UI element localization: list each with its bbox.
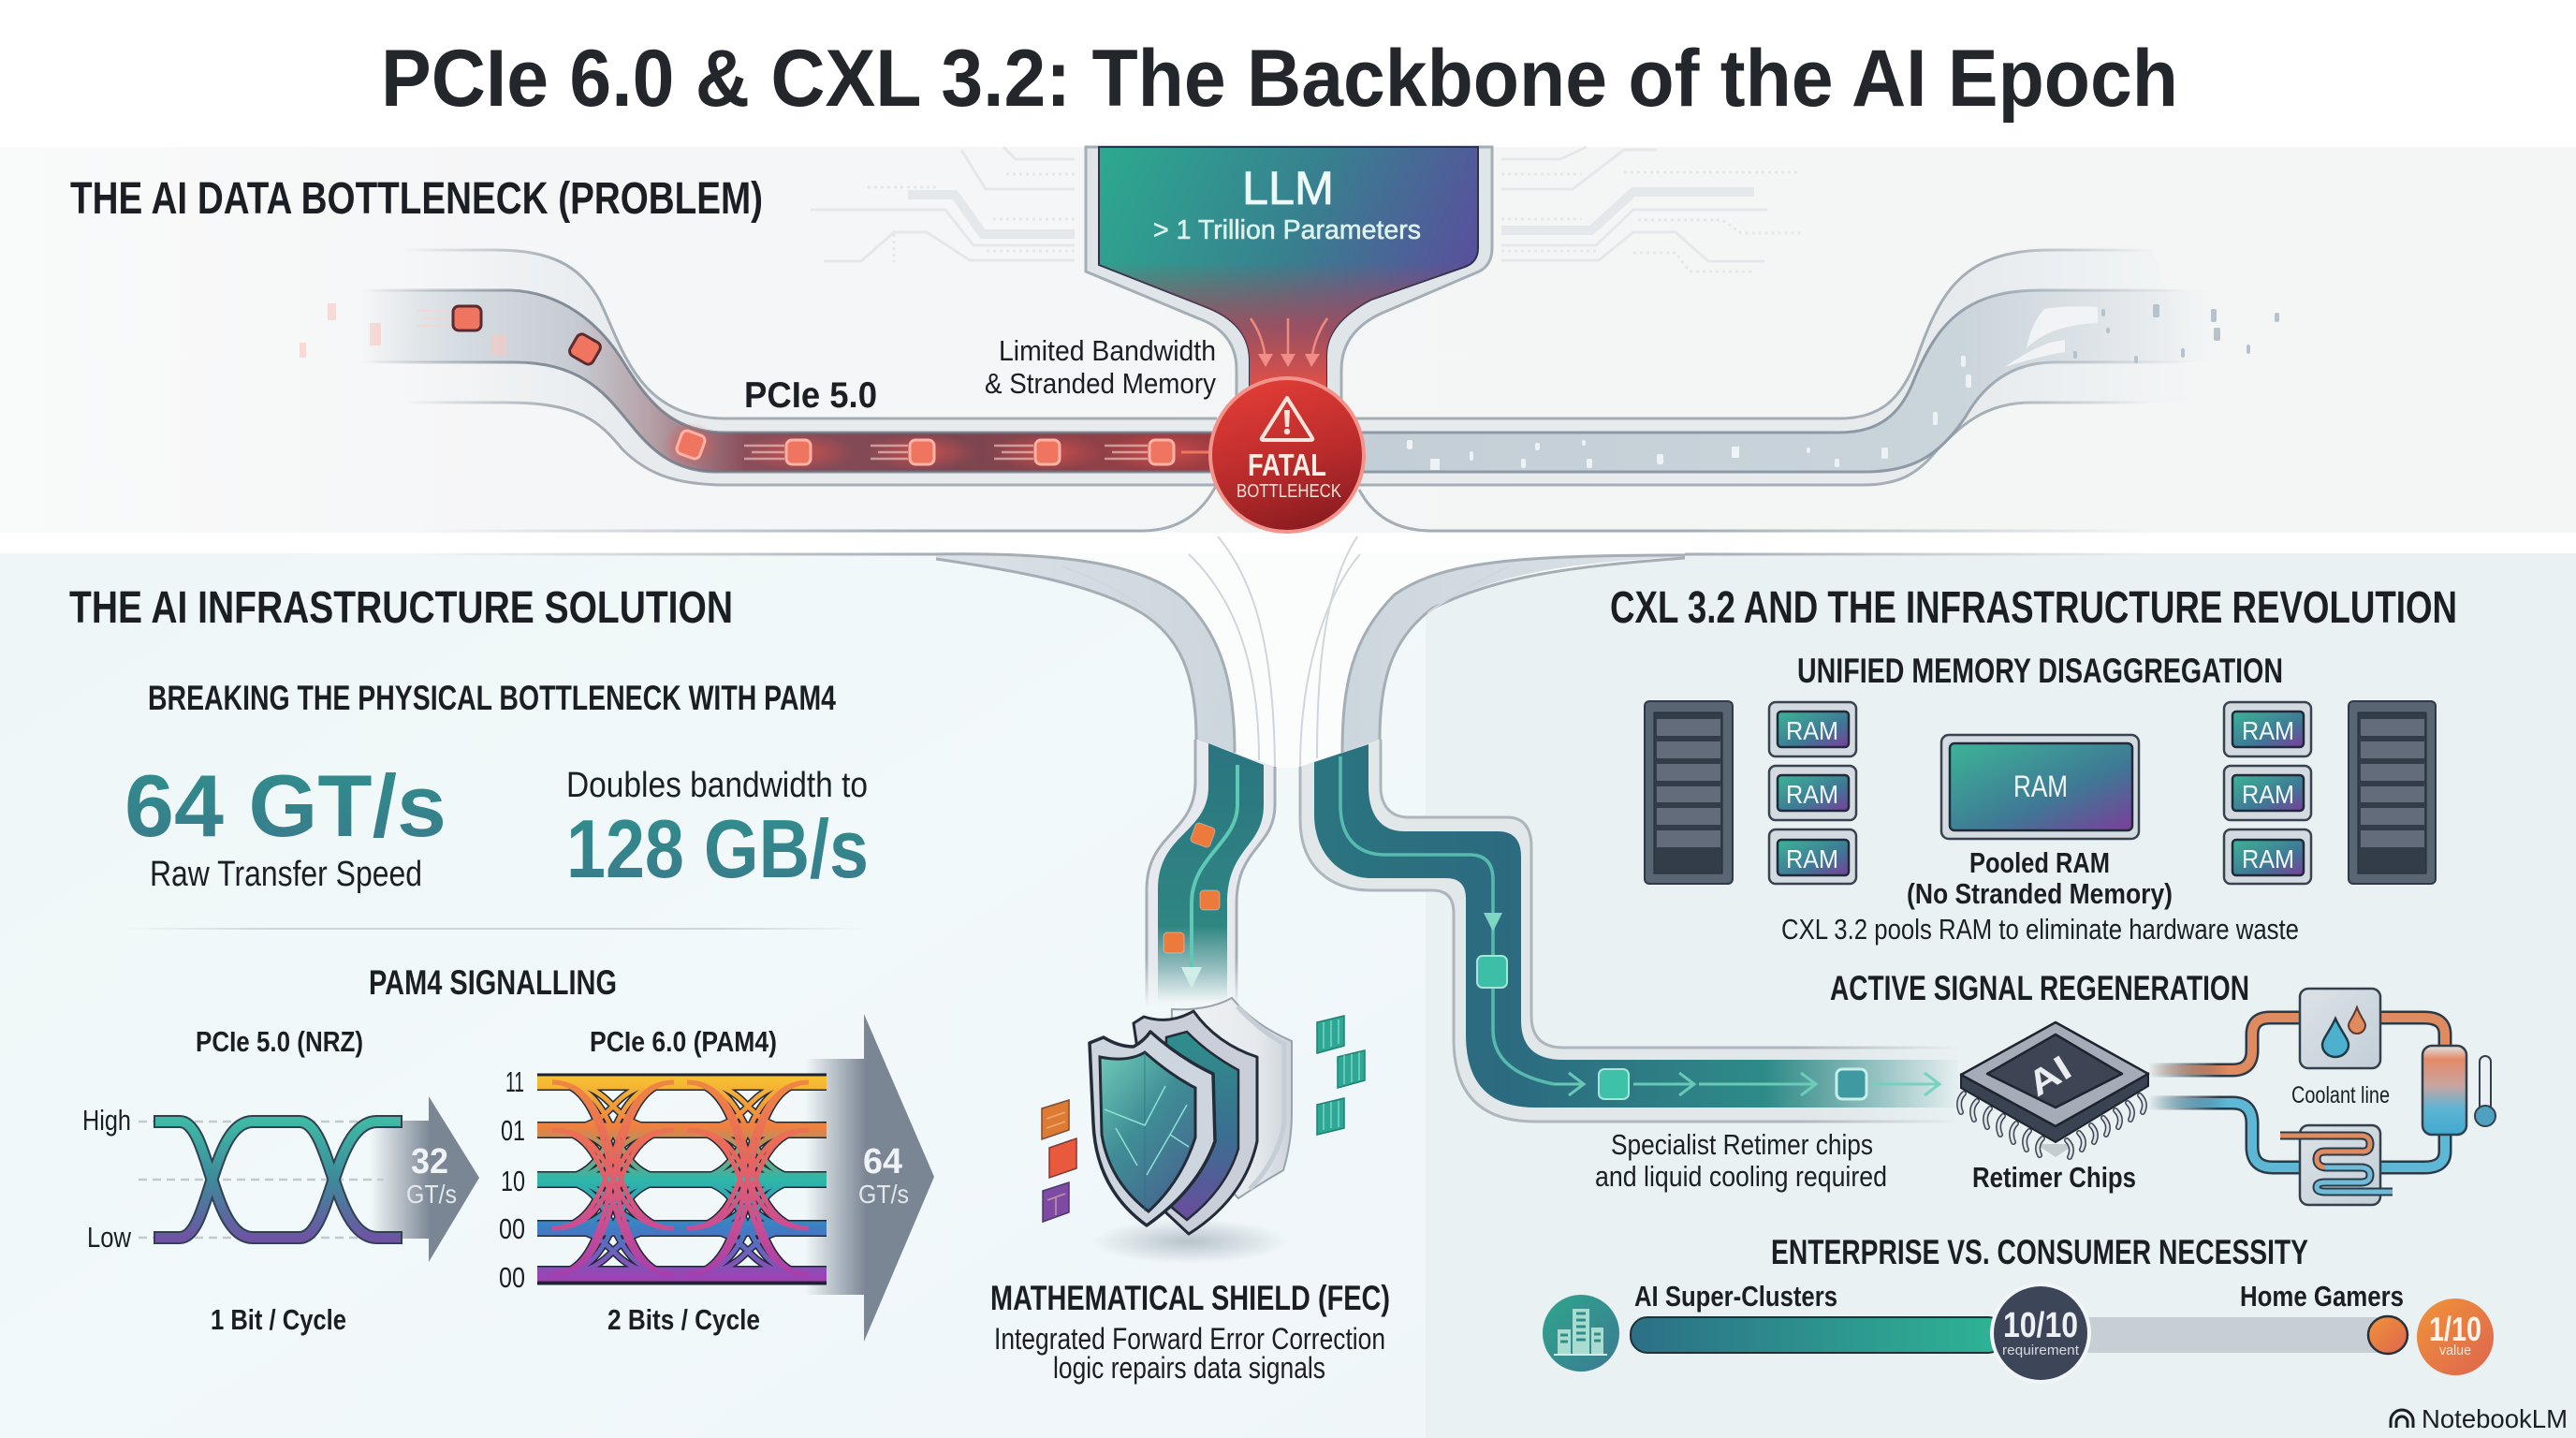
PAM4 eye diagram: 2 Bits / Cycle bbox=[607, 1303, 760, 1336]
label LLM: LLM bbox=[1242, 162, 1334, 214]
FEC text: logic repairs data signals bbox=[1053, 1351, 1325, 1385]
circuit traces right of LLM bbox=[1501, 147, 1802, 271]
RAM modules right: RAM bbox=[2242, 844, 2294, 873]
FEC text: MATHEMATICAL SHIELD (FEC) bbox=[990, 1279, 1390, 1317]
retimer captions: and liquid cooling required bbox=[1595, 1160, 1887, 1193]
NRZ diagram: Low bbox=[87, 1221, 132, 1254]
title: PCIe 6.0 & CXL 3.2: The Backbone of the AI Epoch bbox=[381, 34, 2178, 124]
gauge labels: AI Super-Clusters bbox=[1634, 1280, 1837, 1313]
level labels: 01 bbox=[501, 1114, 525, 1147]
front shield bbox=[1090, 1032, 1215, 1225]
pooled RAM caption: Pooled RAM bbox=[1969, 846, 2110, 879]
gauge labels bbox=[1634, 1280, 2404, 1313]
1/10 badge: value bbox=[2439, 1343, 2471, 1358]
data packets bbox=[453, 306, 1174, 464]
RAM modules right bbox=[2224, 702, 2311, 884]
RAM modules left: RAM bbox=[1786, 780, 1838, 809]
shield icon bbox=[1090, 998, 1292, 1264]
label PCIe 5.0: PCIe 5.0 bbox=[744, 375, 877, 416]
back shield bbox=[1170, 998, 1292, 1198]
fatal bottleneck badge bbox=[1210, 378, 1364, 532]
heading: PAM4 signalling: PAM4 SIGNALLING bbox=[369, 963, 617, 1002]
level labels: 00 bbox=[499, 1212, 525, 1245]
arrow 32 GT/s bbox=[370, 1096, 479, 1262]
white swooshes and particles bbox=[1407, 306, 2098, 470]
label parameters: > 1 Trillion Parameters bbox=[1153, 215, 1421, 245]
pooled RAM caption: CXL 3.2 pools RAM to eliminate hardware waste bbox=[1781, 913, 2299, 946]
PAM4 eye diagram bbox=[499, 1014, 934, 1342]
circuit traces left of LLM bbox=[811, 147, 1075, 262]
gauge bar bbox=[1631, 1316, 2408, 1354]
level labels bbox=[499, 1065, 525, 1294]
server rack right bbox=[2349, 701, 2436, 884]
pooled RAM: RAM bbox=[2013, 770, 2068, 803]
NotebookLM mark: NotebookLM bbox=[2422, 1404, 2568, 1433]
RAM modules left bbox=[1769, 702, 1856, 884]
label limited bandwidth bbox=[985, 334, 1216, 400]
RAM modules right: RAM bbox=[2242, 716, 2294, 745]
arrow 64 GT/s: GT/s bbox=[858, 1180, 909, 1209]
level labels: 11 bbox=[505, 1065, 524, 1098]
middle shield bbox=[1134, 1011, 1257, 1234]
arrow 32 GT/s: 32 bbox=[411, 1142, 448, 1181]
level labels: 00 bbox=[499, 1261, 525, 1294]
heat exchanger coil bbox=[2280, 1125, 2393, 1205]
cooling block with drops bbox=[2300, 989, 2380, 1068]
RAM modules left: RAM bbox=[1786, 844, 1838, 873]
RAM modules left: RAM bbox=[1786, 716, 1838, 745]
PAM4 eye diagram: PCIe 6.0 (PAM4) bbox=[590, 1025, 777, 1058]
error chips left bbox=[1042, 1100, 1076, 1222]
warning triangle bbox=[1262, 398, 1312, 440]
NRZ diagram bbox=[82, 1025, 479, 1336]
label coolant line: Coolant line bbox=[2291, 1082, 2390, 1108]
stat: 64 GT/s: 64 GT/s bbox=[124, 756, 446, 855]
pooled RAM caption: (No Stranded Memory) bbox=[1907, 877, 2173, 910]
label limited bandwidth: Limited Bandwidth bbox=[999, 334, 1216, 367]
heading: problem: THE AI DATA BOTTLENECK (PROBLEM) bbox=[70, 174, 763, 224]
flow arrows bbox=[1251, 318, 1327, 360]
arrow 64 GT/s bbox=[805, 1014, 934, 1342]
retimer captions: Specialist Retimer chips bbox=[1611, 1128, 1873, 1161]
RAM modules right: RAM bbox=[2242, 780, 2294, 809]
boundary line under the problem panel bbox=[421, 484, 2153, 531]
arrowhead bbox=[1181, 967, 1202, 989]
1/10 badge bbox=[2417, 1299, 2494, 1375]
fatal bottleneck badge: FATAL bbox=[1248, 448, 1326, 482]
thermometer bbox=[2475, 1056, 2496, 1126]
funnel gray shell left bbox=[936, 555, 1235, 753]
repaired chips right bbox=[1317, 1016, 1365, 1135]
label limited bandwidth: & Stranded Memory bbox=[985, 367, 1216, 400]
left pipe: FEC input bbox=[1147, 740, 1275, 1006]
NRZ diagram: 1 Bit / Cycle bbox=[211, 1303, 346, 1336]
subheading: enterprise: ENTERPRISE VS. CONSUMER NECESSITY bbox=[1771, 1233, 2308, 1271]
stat: 64 GT/s: Raw Transfer Speed bbox=[150, 855, 422, 894]
packet glows bbox=[663, 422, 1218, 471]
converging white funnel bbox=[936, 553, 1685, 768]
gauge labels: Home Gamers bbox=[2240, 1280, 2404, 1313]
fatal bottleneck badge: BOTTLEHECK bbox=[1237, 481, 1342, 502]
arrow 64 GT/s: 64 bbox=[863, 1142, 902, 1181]
panel: problem background bbox=[0, 147, 2576, 533]
10/10 badge: 10/10 bbox=[2003, 1306, 2078, 1345]
building icon bbox=[1543, 1295, 1619, 1372]
stat: 128 GB/s bbox=[566, 766, 869, 895]
FEC text bbox=[990, 1279, 1390, 1385]
eye traces bbox=[537, 1075, 827, 1284]
pooled RAM caption bbox=[1781, 846, 2299, 946]
retimer captions: Retimer Chips bbox=[1972, 1161, 2136, 1194]
coolant tank bbox=[2422, 1046, 2466, 1135]
1/10 badge: 1/10 bbox=[2429, 1310, 2481, 1348]
subheading: PAM4: BREAKING THE PHYSICAL BOTTLENECK WITH PAM4 bbox=[148, 679, 836, 717]
retimer chip: AI bbox=[2020, 1048, 2078, 1104]
panel: solution background bbox=[0, 553, 1426, 1438]
LLM funnel block bbox=[1086, 147, 1492, 417]
NRZ diagram: High bbox=[82, 1104, 131, 1137]
10/10 badge bbox=[1990, 1283, 2091, 1384]
PCIe 5.0 congested lane bbox=[300, 250, 1218, 485]
retimer captions bbox=[1595, 1128, 2136, 1194]
FEC text: Integrated Forward Error Correction bbox=[994, 1322, 1385, 1356]
coolant loop bbox=[2148, 1018, 2445, 1167]
level labels: 10 bbox=[501, 1165, 525, 1197]
corrupted packets bbox=[1164, 822, 1220, 953]
server rack left bbox=[1645, 701, 1733, 884]
stat: 128 GB/s: 128 GB/s bbox=[566, 802, 869, 895]
clean lane on right bbox=[1348, 250, 2279, 485]
subheading: regeneration: ACTIVE SIGNAL REGENERATION bbox=[1830, 969, 2249, 1007]
arrow 32 GT/s: GT/s bbox=[406, 1180, 457, 1209]
signal packets and arrows bbox=[1554, 1073, 1939, 1095]
pooled RAM bbox=[1941, 735, 2139, 839]
right pipe: to retimer bbox=[1300, 740, 1958, 1122]
NRZ diagram: PCIe 5.0 (NRZ) bbox=[196, 1025, 363, 1058]
panel: CXL background bbox=[1426, 553, 2576, 1438]
retimer chip bbox=[1959, 1022, 2148, 1157]
10/10 badge: requirement bbox=[2002, 1343, 2080, 1358]
subheading: memory: UNIFIED MEMORY DISAGGREGATION bbox=[1797, 652, 2283, 690]
funnel gray shell right bbox=[1342, 555, 1685, 753]
stat: 128 GB/s: Doubles bandwidth to bbox=[566, 766, 868, 805]
heading: solution: THE AI INFRASTRUCTURE SOLUTION bbox=[69, 583, 733, 633]
